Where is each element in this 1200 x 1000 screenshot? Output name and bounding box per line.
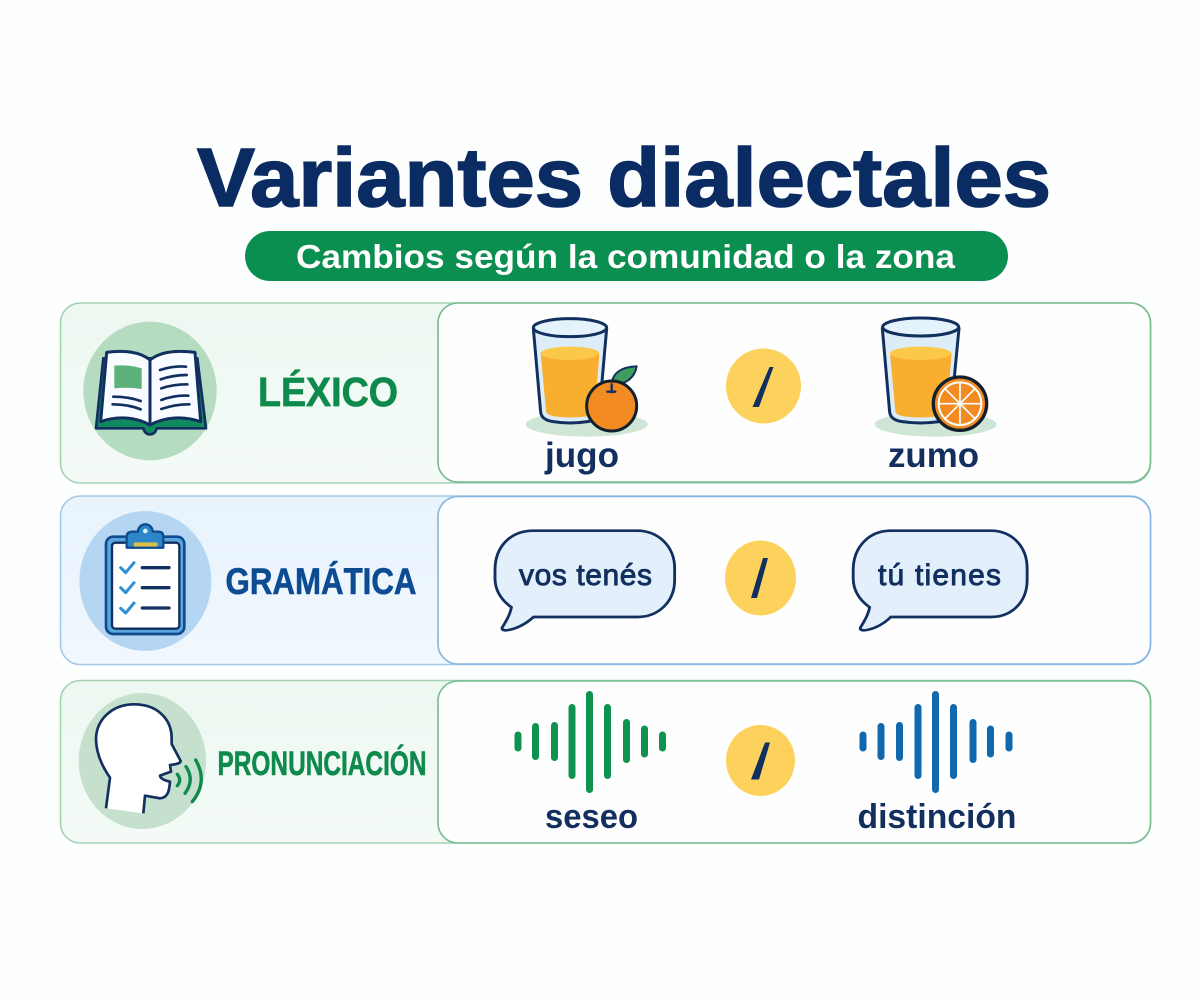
label: tú tienes: tú tienes: [878, 559, 1001, 592]
label: vos tenés: vos tenés: [519, 559, 652, 592]
panel: léxico: [60, 303, 1150, 483]
panel: gramática: [60, 496, 1150, 664]
icon: speaking head: [79, 693, 206, 829]
icon: juice glass with orange: [526, 319, 648, 437]
title: Variantes dialectales: [197, 131, 1051, 224]
heading: pronunciación: PRONUNCIACIÓN: [218, 745, 426, 783]
sound wave: seseo: [514, 691, 666, 793]
content panel: pronunciación: [438, 681, 1150, 843]
subtitle pill: Cambios según la comunidad o la zona: [296, 238, 956, 275]
separator: slash: [726, 725, 795, 796]
heading: léxico: LÉXICO: [258, 369, 398, 415]
label: jugo: jugo: [544, 436, 619, 475]
separator: slash: [725, 540, 796, 616]
content panel: léxico: [438, 303, 1150, 482]
icon: clipboard checklist: [79, 511, 211, 651]
icon: juice glass with orange slice: [875, 318, 997, 437]
panel: pronunciación: [60, 680, 1150, 843]
label: zumo: zumo: [888, 436, 979, 475]
speech bubble: tú tienes: [853, 531, 1027, 630]
heading: gramática: GRAMÁTICA: [226, 561, 416, 602]
label: distinción: distinción: [858, 798, 1016, 836]
icon: open book: [83, 322, 217, 460]
label: seseo: seseo: [545, 798, 638, 836]
content panel: gramática: [438, 496, 1150, 664]
sound wave: distinción: [860, 691, 1012, 793]
subtitle pill: [245, 231, 1008, 281]
speech bubble: vos tenés: [495, 531, 675, 630]
separator: slash: [726, 348, 801, 424]
